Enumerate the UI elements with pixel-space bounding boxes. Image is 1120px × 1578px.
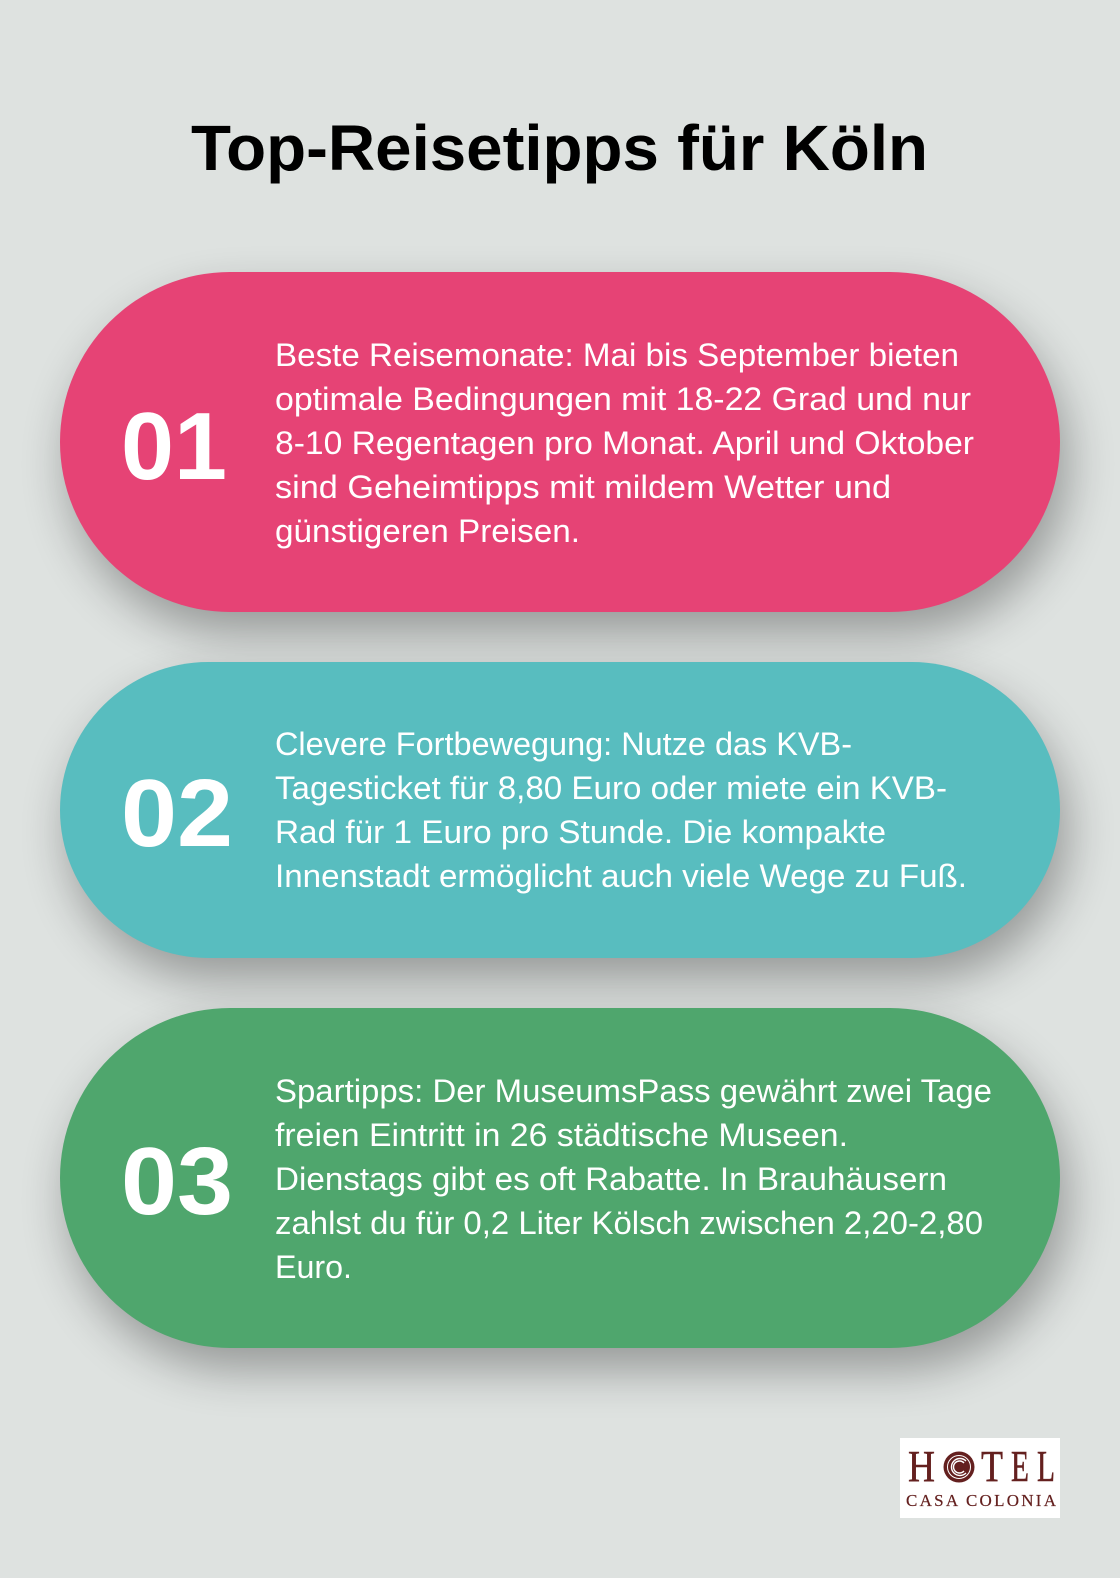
number 03: 03 (121, 1128, 233, 1235)
panel: tip 3 pill (60, 1008, 1060, 1348)
logo: Hotel Casa Colonia: H (908, 1442, 935, 1491)
title: Top-Reisetipps für Köln (191, 112, 928, 184)
text block: tip 1: 8-10 Regentagen pro Monat. April und Oktober (275, 425, 974, 461)
text block: tip 3 (275, 1073, 992, 1285)
text block: tip 2: Clevere Fortbewegung: Nutze das KVB- (275, 726, 852, 762)
text block: tip 1: optimale Bedingungen mit 18-22 Grad und nur (275, 381, 971, 417)
text block: tip 3: Spartipps: Der MuseumsPass gewährt zwei Tage (275, 1073, 992, 1109)
text block: tip 3: Euro. (275, 1249, 352, 1285)
number 01: 01 (121, 393, 227, 500)
text block: tip 3: zahlst du für 0,2 Liter Kölsch zwischen 2,20-2,80 (275, 1205, 983, 1241)
logo: Hotel Casa Colonia: E (1011, 1442, 1029, 1491)
text block: tip 1: Beste Reisemonate: Mai bis September bieten (275, 337, 959, 373)
number 02: 02 (121, 760, 233, 867)
panel: tip 1 pill (60, 272, 1060, 612)
text block: tip 1 (275, 337, 974, 549)
logo: Hotel Casa Colonia: L (1037, 1442, 1055, 1491)
text block: tip 3: freien Eintritt in 26 städtische Museen. (275, 1117, 848, 1153)
text block: tip 2: Innenstadt ermöglicht auch viele Wege zu Fuß. (275, 858, 967, 894)
panel: tip 2 pill (60, 662, 1060, 958)
logo: Hotel Casa Colonia: CASA COLONIA (906, 1491, 1057, 1510)
text block: tip 1: sind Geheimtipps mit mildem Wetter und (275, 469, 891, 505)
logo: Hotel Casa Colonia (900, 1438, 1060, 1518)
text block: tip 3: Dienstags gibt es oft Rabatte. In Brauhäusern (275, 1161, 947, 1197)
text block: tip 2: Rad für 1 Euro pro Stunde. Die kompakte (275, 814, 886, 850)
text block: tip 2: Tagesticket für 8,80 Euro oder miete ein KVB- (275, 770, 947, 806)
logo: Hotel Casa Colonia: T (981, 1442, 1003, 1491)
text block: tip 1: günstigeren Preisen. (275, 513, 580, 549)
text block: tip 2 (275, 726, 967, 894)
